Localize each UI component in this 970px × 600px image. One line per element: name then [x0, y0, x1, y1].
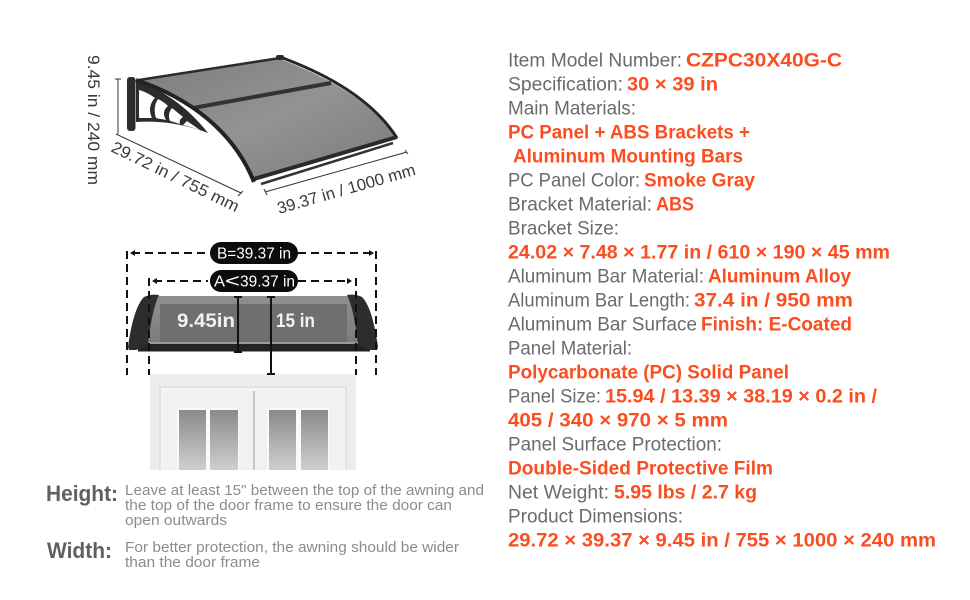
wall bracket	[127, 77, 208, 133]
label: A width: <	[225, 271, 240, 291]
specification list: 5.95 lbs / 2.7 kg	[614, 482, 757, 504]
dimension label: depth: 29.72 in / 755 mm	[108, 138, 242, 216]
specification list: 15.94 / 13.39 × 38.19 × 0.2 in /	[605, 386, 878, 408]
measure: 15 in: 15 in	[276, 310, 315, 332]
note: width	[47, 538, 459, 571]
specification list: 405 / 340 × 970 × 5 mm	[508, 410, 728, 432]
specification list: ABS	[656, 194, 694, 216]
specification list: Smoke Gray	[644, 170, 755, 192]
specification list: PC Panel + ABS Brackets +	[508, 122, 750, 144]
specification list: Finish: E-Coated	[701, 314, 852, 336]
specification list: Panel Size:	[508, 386, 601, 408]
awning panel	[136, 55, 397, 184]
label: B width	[210, 242, 298, 264]
measure: 15 in	[267, 297, 315, 374]
dimension lines	[115, 79, 408, 196]
specification list: Polycarbonate (PC) Solid Panel	[508, 362, 789, 384]
note: width: For better protection, the awning should be wider	[125, 540, 459, 556]
specification list: Aluminum Bar Surface	[508, 314, 697, 336]
specification list: Aluminum Mounting Bars	[513, 146, 743, 168]
specification list: Main Materials:	[508, 98, 636, 120]
measure: 9.45 in: 9.45in	[177, 310, 235, 332]
specification list: 24.02 × 7.48 × 1.77 in / 610 × 190 × 45 mm	[508, 242, 890, 264]
specification list: Specification:	[508, 74, 623, 96]
note: height: open outwards	[125, 513, 227, 529]
specification list: Aluminum Bar Material:	[508, 266, 704, 288]
specification list: PC Panel Color:	[508, 170, 640, 192]
note: height: Leave at least 15" between the top of the awning and	[125, 483, 484, 499]
front-view awning	[128, 295, 378, 352]
dashed width guide lines	[127, 251, 376, 375]
specification list: Bracket Material:	[508, 194, 652, 216]
dimension label: width: 39.37 in / 1000 mm	[275, 161, 418, 218]
label: A width	[210, 270, 298, 292]
specification list: Product Dimensions:	[508, 506, 683, 528]
note: width: than the door frame	[125, 555, 260, 571]
dimension label: height: 9.45 in / 240 mm	[84, 55, 102, 185]
measure: 9.45 in	[177, 297, 242, 352]
specification list: Panel Material:	[508, 338, 632, 360]
note: height: Height:	[46, 481, 118, 506]
specification list: Double-Sided Protective Film	[508, 458, 773, 480]
note: height: the top of the door frame to ensure the door can	[125, 498, 452, 514]
specification list: 30 × 39 in	[627, 74, 718, 96]
specification list: 29.72 × 39.37 × 9.45 in / 755 × 1000 × 240 mm	[508, 530, 936, 552]
label: A width: A	[214, 274, 225, 290]
specification list: CZPC30X40G-C	[686, 50, 842, 72]
specification list: Aluminum Alloy	[708, 266, 851, 288]
specification list: Item Model Number:	[508, 50, 682, 72]
illustration: door with front-view awning	[127, 242, 378, 470]
specification list: Panel Surface Protection:	[508, 434, 722, 456]
specification list: Bracket Size:	[508, 218, 619, 240]
label: B width: B=39.37 in	[217, 246, 291, 262]
specification list: Net Weight:	[508, 482, 609, 504]
note: height	[46, 481, 484, 529]
arrowheads	[130, 250, 374, 284]
note: width: Width:	[47, 538, 112, 563]
door	[150, 374, 356, 470]
specification list: 37.4 in / 950 mm	[694, 290, 853, 312]
label: A width: 39.37 in	[240, 274, 295, 290]
specification list: Aluminum Bar Length:	[508, 290, 690, 312]
specification list	[508, 50, 936, 552]
illustration: awning isometric view with dimensions	[84, 55, 418, 218]
